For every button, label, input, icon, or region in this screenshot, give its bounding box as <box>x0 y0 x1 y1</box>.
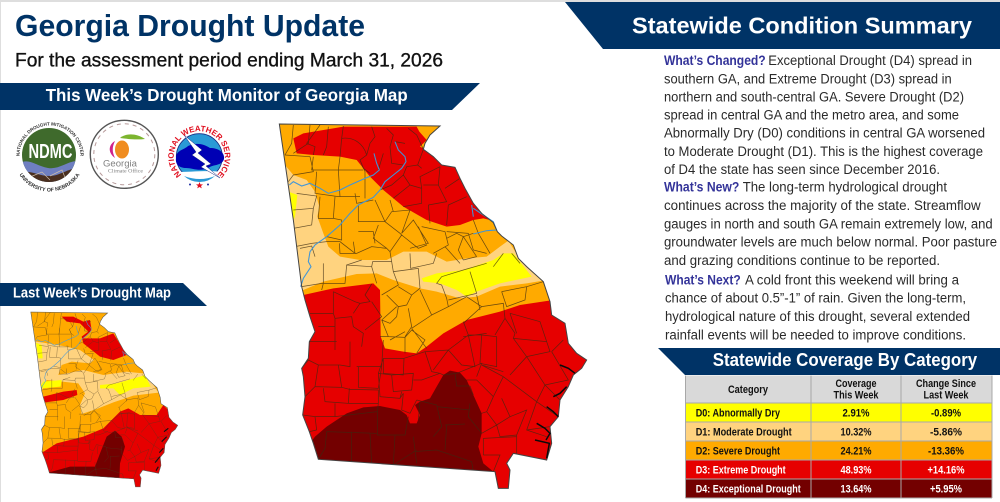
title: Georgia Drought Update <box>15 8 365 43</box>
text block: what's changed: spread in central GA and the metro area, and some <box>664 107 959 122</box>
row: D3 <box>686 460 992 479</box>
banner: statewide coverage by category: Statewide Coverage By Category <box>713 350 977 370</box>
text block: what's changed: northern and south-central GA. Severe Drought (D2) <box>664 90 964 105</box>
banner: this week's map <box>0 83 480 110</box>
text block: what's next: chance of about 0.5”-1” of rain. Given the long-term, <box>665 291 966 306</box>
row: D2: 24.21% <box>840 446 872 458</box>
coastal marsh <box>535 365 575 458</box>
text block: what's next <box>665 272 970 342</box>
D3 extreme drought north <box>293 127 497 227</box>
row: D2: D2: Severe Drought <box>696 446 780 458</box>
logo: NDMC: NATIONAL DROUGHT MITIGATION CENTER <box>16 122 84 156</box>
row: D1: D1: Moderate Drought <box>696 426 792 438</box>
logo: NDMC <box>16 122 84 192</box>
text block: what's changed <box>664 53 985 177</box>
banner: last week's map: Last Week’s Drought Map <box>13 286 171 302</box>
logo: NDMC: NDMC <box>28 141 72 163</box>
D1 moderate drought band <box>32 341 158 414</box>
text block: what's next: What’s Next? <box>665 272 741 287</box>
table header: Coverage <box>836 378 876 390</box>
state outline <box>279 124 587 488</box>
D1 moderate drought area <box>277 163 547 298</box>
banner: statewide coverage by category <box>658 348 1000 375</box>
rivers <box>289 142 497 287</box>
text block: what's next: rainfall events will be needed to improve conditions. <box>665 327 966 342</box>
row: D3: 48.93% <box>840 464 872 476</box>
logo: National Weather Service: NATIONAL WEATHER SERVICE <box>168 126 230 178</box>
text block: what's new <box>664 180 997 268</box>
row: D1: -5.86% <box>930 426 962 438</box>
D4 exceptional drought area <box>48 431 125 480</box>
D2 severe drought base <box>280 124 550 354</box>
table header <box>686 376 992 403</box>
row: D1 <box>686 422 992 441</box>
text block: what's new: continues across the majority of the state. Streamflow <box>664 198 981 213</box>
row: D4 <box>686 479 992 498</box>
text block: what's changed: southern GA, and Extreme Drought (D3) spread in <box>664 71 952 86</box>
text block: what's changed: What’s Changed? <box>664 53 766 68</box>
D2 severe drought base <box>31 312 178 487</box>
row: D4: D4: Exceptional Drought <box>696 484 801 496</box>
text block: what's new: What’s New? <box>664 180 739 195</box>
logo: Georgia Climate Office: Climate Office <box>108 168 144 174</box>
D0 abnormally dry patches <box>288 192 532 297</box>
row: D0: D0: Abnormally Dry <box>696 408 781 420</box>
row: D1: 10.32% <box>840 426 872 438</box>
text block: what's new: groundwater levels are much below normal. Poor pasture <box>664 235 997 250</box>
text block: what's next: A cold front this weekend will bring a <box>745 272 960 287</box>
banner: last week's map <box>0 283 207 306</box>
text block: what's changed: Exceptional Drought (D4) spread in <box>768 53 972 68</box>
text block: what's changed: to Moderate Drought (D1). This is the highest coverage <box>664 144 983 159</box>
table: coverage by category <box>686 376 992 498</box>
row: D0: 2.91% <box>842 408 870 420</box>
subtitle: For the assessment period ending March 31, 2026 <box>15 51 443 72</box>
logo: Georgia Climate Office <box>90 120 158 188</box>
row: D3: D3: Extreme Drought <box>696 464 786 476</box>
row: D4: 13.64% <box>840 484 872 496</box>
county lines <box>285 125 568 472</box>
row: D4: +5.95% <box>930 484 962 496</box>
banner: statewide condition summary <box>565 2 1000 49</box>
map: this week's drought <box>273 120 593 502</box>
banner: this week's map: This Week’s Drought Monitor of Georgia Map <box>46 85 408 105</box>
D3 extreme drought areas <box>40 317 182 490</box>
logo: Georgia Climate Office: Georgia <box>103 159 137 169</box>
text block: what's changed: of D4 the state has seen since December 2016. <box>664 162 940 177</box>
D0 abnormally dry patches <box>36 343 151 395</box>
row: D0: -0.89% <box>931 408 961 420</box>
text block: what's changed: Abnormally Dry (D0) conditions in central GA worsened <box>664 126 985 141</box>
text block: what's new: The long-term hydrological drought <box>743 180 947 195</box>
banner: statewide condition summary: Statewide Condition Summary <box>632 12 972 38</box>
row: D0 <box>686 403 992 422</box>
table header: This Week <box>834 389 879 401</box>
row: D2 <box>686 441 992 460</box>
table header: Change Since <box>916 378 976 390</box>
row: D3: +14.16% <box>928 464 965 476</box>
text block: what's new: and grazing conditions continue to be reported. <box>664 253 940 268</box>
D4 exceptional drought <box>312 370 493 472</box>
logo: NDMC: UNIVERSITY OF NEBRASKA <box>20 172 80 192</box>
map: last week's drought <box>27 308 183 492</box>
D3 extreme drought south <box>302 283 586 488</box>
text block: what's next: hydrological nature of this drought, several extended <box>665 309 970 324</box>
text block: what's new: gauges in north and south GA remain extremely low, and <box>664 216 993 231</box>
table header: Last Week <box>924 389 969 401</box>
row: D2: -13.36% <box>928 446 964 458</box>
table header: Category <box>728 384 769 396</box>
